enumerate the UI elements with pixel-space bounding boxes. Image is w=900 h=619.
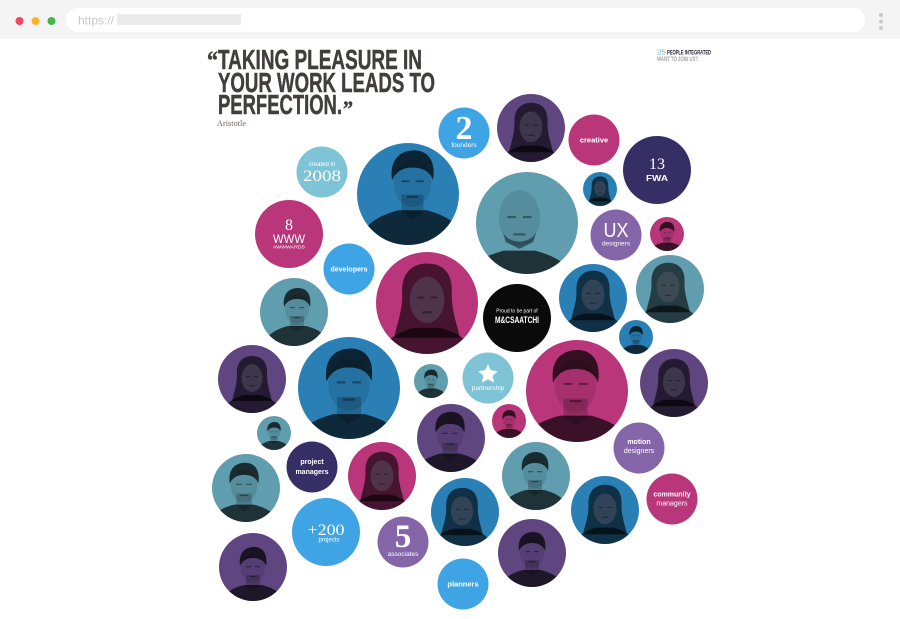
address bar: https://: [78, 14, 115, 28]
quote title: “: [207, 46, 218, 75]
photo: woman, purple: [640, 349, 708, 417]
award: 8 WWW awards: 8: [285, 217, 293, 234]
photo: man, blue: [298, 337, 400, 439]
photo: man looking up, blue: [357, 143, 459, 245]
label: developers: developers: [331, 266, 368, 274]
photo: man with long hair, blue: [571, 476, 639, 544]
people counter: [657, 48, 711, 63]
quote title: TAKING PLEASURE IN: [218, 44, 422, 75]
photo: woman, pink: [348, 442, 416, 510]
badge: M&amp;C Saatchi: Proud to be part of: [496, 308, 538, 314]
award: 13 FWA: [623, 136, 691, 204]
stat: created in 2008: [296, 146, 348, 198]
stat: partnership: [462, 352, 514, 404]
badge: M&amp;C Saatchi: M&CSAATCHI: [495, 315, 539, 326]
quote author: Aristotle: [217, 118, 246, 128]
label: project managers: project: [300, 459, 324, 466]
stat: +200 projects: +200: [308, 522, 344, 539]
people counter: PEOPLE INTEGRATED: [667, 50, 711, 56]
stat: partnership: partnership: [472, 385, 505, 392]
menu dots: [879, 13, 883, 30]
stat: 2 founders: [438, 108, 490, 158]
photo: man, teal: [212, 454, 280, 522]
window control dots: [16, 17, 56, 25]
label: creative: [568, 114, 620, 166]
stat: created in 2008: created in: [309, 162, 335, 168]
photo: small man, teal: [414, 364, 448, 398]
photo: small man, teal: [257, 416, 291, 450]
stat: UX designers: designers: [602, 240, 631, 248]
photo: woman, teal: [636, 255, 704, 323]
photo: woman, purple: [218, 345, 286, 419]
photo: man with glasses, purple: [219, 533, 287, 601]
label: planners: planners: [447, 580, 479, 588]
browser top bar: [0, 0, 900, 39]
stat: 5 associates: 5: [395, 519, 411, 555]
quote title: YOUR WORK LEADS TO: [218, 67, 435, 98]
label: developers: [324, 244, 374, 294]
label: project managers: [286, 442, 338, 492]
award: 13 FWA: FWA: [646, 174, 668, 183]
photo: woman, blue: [559, 264, 627, 332]
label: community managers: managers: [656, 500, 688, 508]
award: 8 WWW awards: WWW: [273, 232, 306, 246]
quote title: [207, 44, 435, 121]
quote title: PERFECTION.: [218, 89, 342, 120]
stat: UX designers: [590, 210, 642, 260]
label: creative: creative: [580, 136, 608, 144]
address bar: [66, 8, 865, 32]
award: 13 FWA: 13: [649, 156, 665, 173]
stat: +200 projects: projects: [318, 538, 340, 544]
photo: small man, pink: [492, 404, 526, 438]
label: planners: [438, 558, 488, 610]
photo: woman, purple: [497, 94, 565, 162]
stat: UX designers: UX: [604, 220, 628, 242]
photo: bald man, teal: [476, 172, 578, 274]
photo: small man, blue: [619, 320, 653, 354]
award: 8 WWW awards: [255, 200, 323, 268]
stat: created in 2008: 2008: [303, 168, 341, 185]
photo: small man, pink: [650, 217, 684, 251]
label: motion designers: motion: [627, 439, 651, 446]
photo: man with glasses, teal: [502, 442, 570, 510]
stat: 2 founders: 2: [456, 110, 472, 147]
badge: M&amp;C Saatchi: [483, 284, 551, 352]
photo: man, purple: [498, 519, 566, 587]
people counter: 25: [657, 48, 666, 56]
stat: 2 founders: founders: [451, 142, 477, 149]
label: motion designers: [614, 422, 664, 474]
award: 8 WWW awards: AWWWARDS: [273, 244, 305, 250]
label: project managers: managers: [295, 469, 329, 476]
label: motion designers: designers: [624, 448, 655, 455]
stat: 5 associates: [378, 516, 428, 568]
photo: curly man, purple: [417, 404, 485, 472]
label: community managers: community: [653, 492, 691, 498]
photo: small woman, blue: [583, 172, 617, 206]
label: community managers: [646, 474, 698, 524]
photo: man, pink: [526, 340, 628, 442]
photo: smiling woman, pink: [376, 252, 478, 354]
people counter: WANT TO JOIN US?: [657, 57, 698, 63]
stat: +200 projects: [292, 498, 360, 566]
photo: woman, blue: [431, 478, 499, 546]
photo: man, teal: [260, 278, 328, 346]
quote title: ”: [343, 96, 353, 121]
stat: 5 associates: associates: [388, 551, 419, 558]
